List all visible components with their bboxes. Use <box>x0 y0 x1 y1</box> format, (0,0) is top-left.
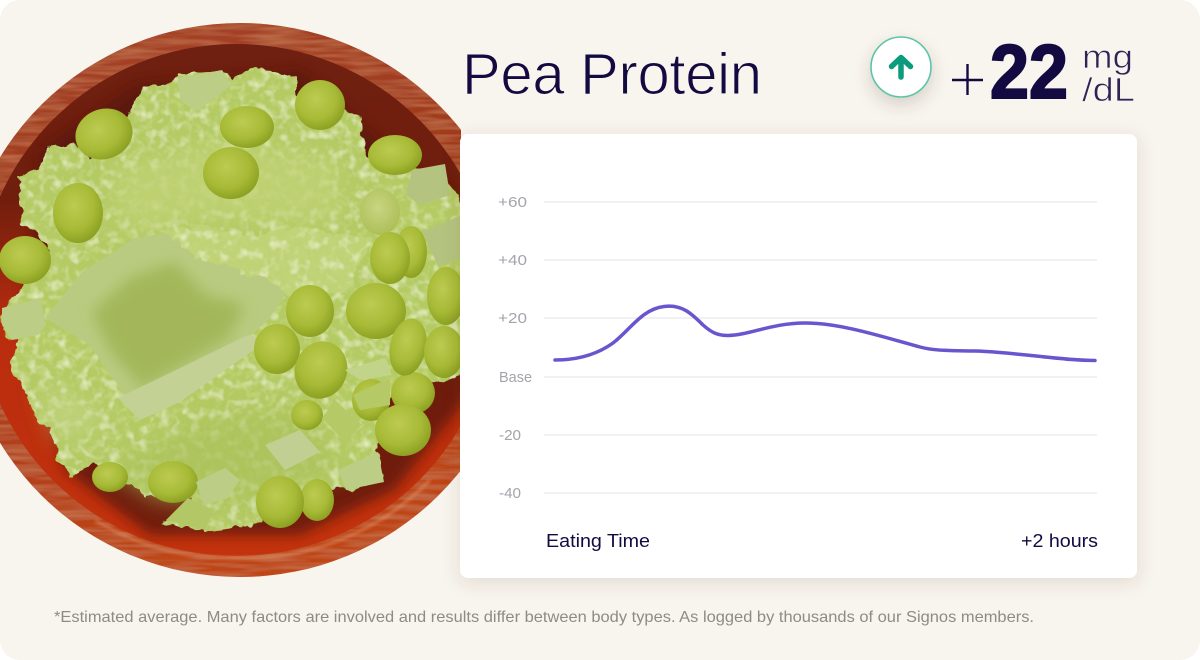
powder mound <box>0 68 470 532</box>
powder tone patches <box>40 140 340 500</box>
powder chunks <box>2 70 460 530</box>
glucose change value <box>952 30 1135 115</box>
unit mg/dL <box>1082 38 1135 108</box>
plus sign <box>952 64 983 95</box>
bowl rim <box>0 23 461 577</box>
icon: up arrow badge <box>871 37 931 97</box>
y axis labels: Base <box>499 369 532 386</box>
y axis labels: -40 <box>499 485 521 502</box>
bowl rim highlight <box>95 480 430 558</box>
y axis labels: +40 <box>498 252 527 269</box>
slab of pressed powder <box>45 226 372 420</box>
title: Pea Protein <box>462 42 762 107</box>
y axis labels: -20 <box>499 427 521 444</box>
panel: chart card: +2 hours <box>1021 531 1098 551</box>
unit mg/dL: mg <box>1082 38 1133 75</box>
y axis labels: +60 <box>498 194 527 211</box>
glucose response curve <box>555 306 1095 360</box>
panel: chart card <box>460 134 1137 578</box>
chart grid <box>544 202 1097 493</box>
bowl interior <box>0 44 494 556</box>
footnote: *Estimated average. Many factors are involved and results differ between body types. As logged by thousands of our Signos members. <box>54 609 1034 626</box>
unit mg/dL: /dL <box>1082 71 1135 108</box>
y axis labels <box>498 194 532 502</box>
powder shadow <box>25 70 470 535</box>
peas <box>0 80 465 528</box>
photo: bowl of pea protein powder with peas <box>0 23 461 577</box>
x axis labels: Eating Time <box>546 531 650 551</box>
number 22: 22 <box>990 30 1068 115</box>
y axis labels: +20 <box>498 310 527 327</box>
